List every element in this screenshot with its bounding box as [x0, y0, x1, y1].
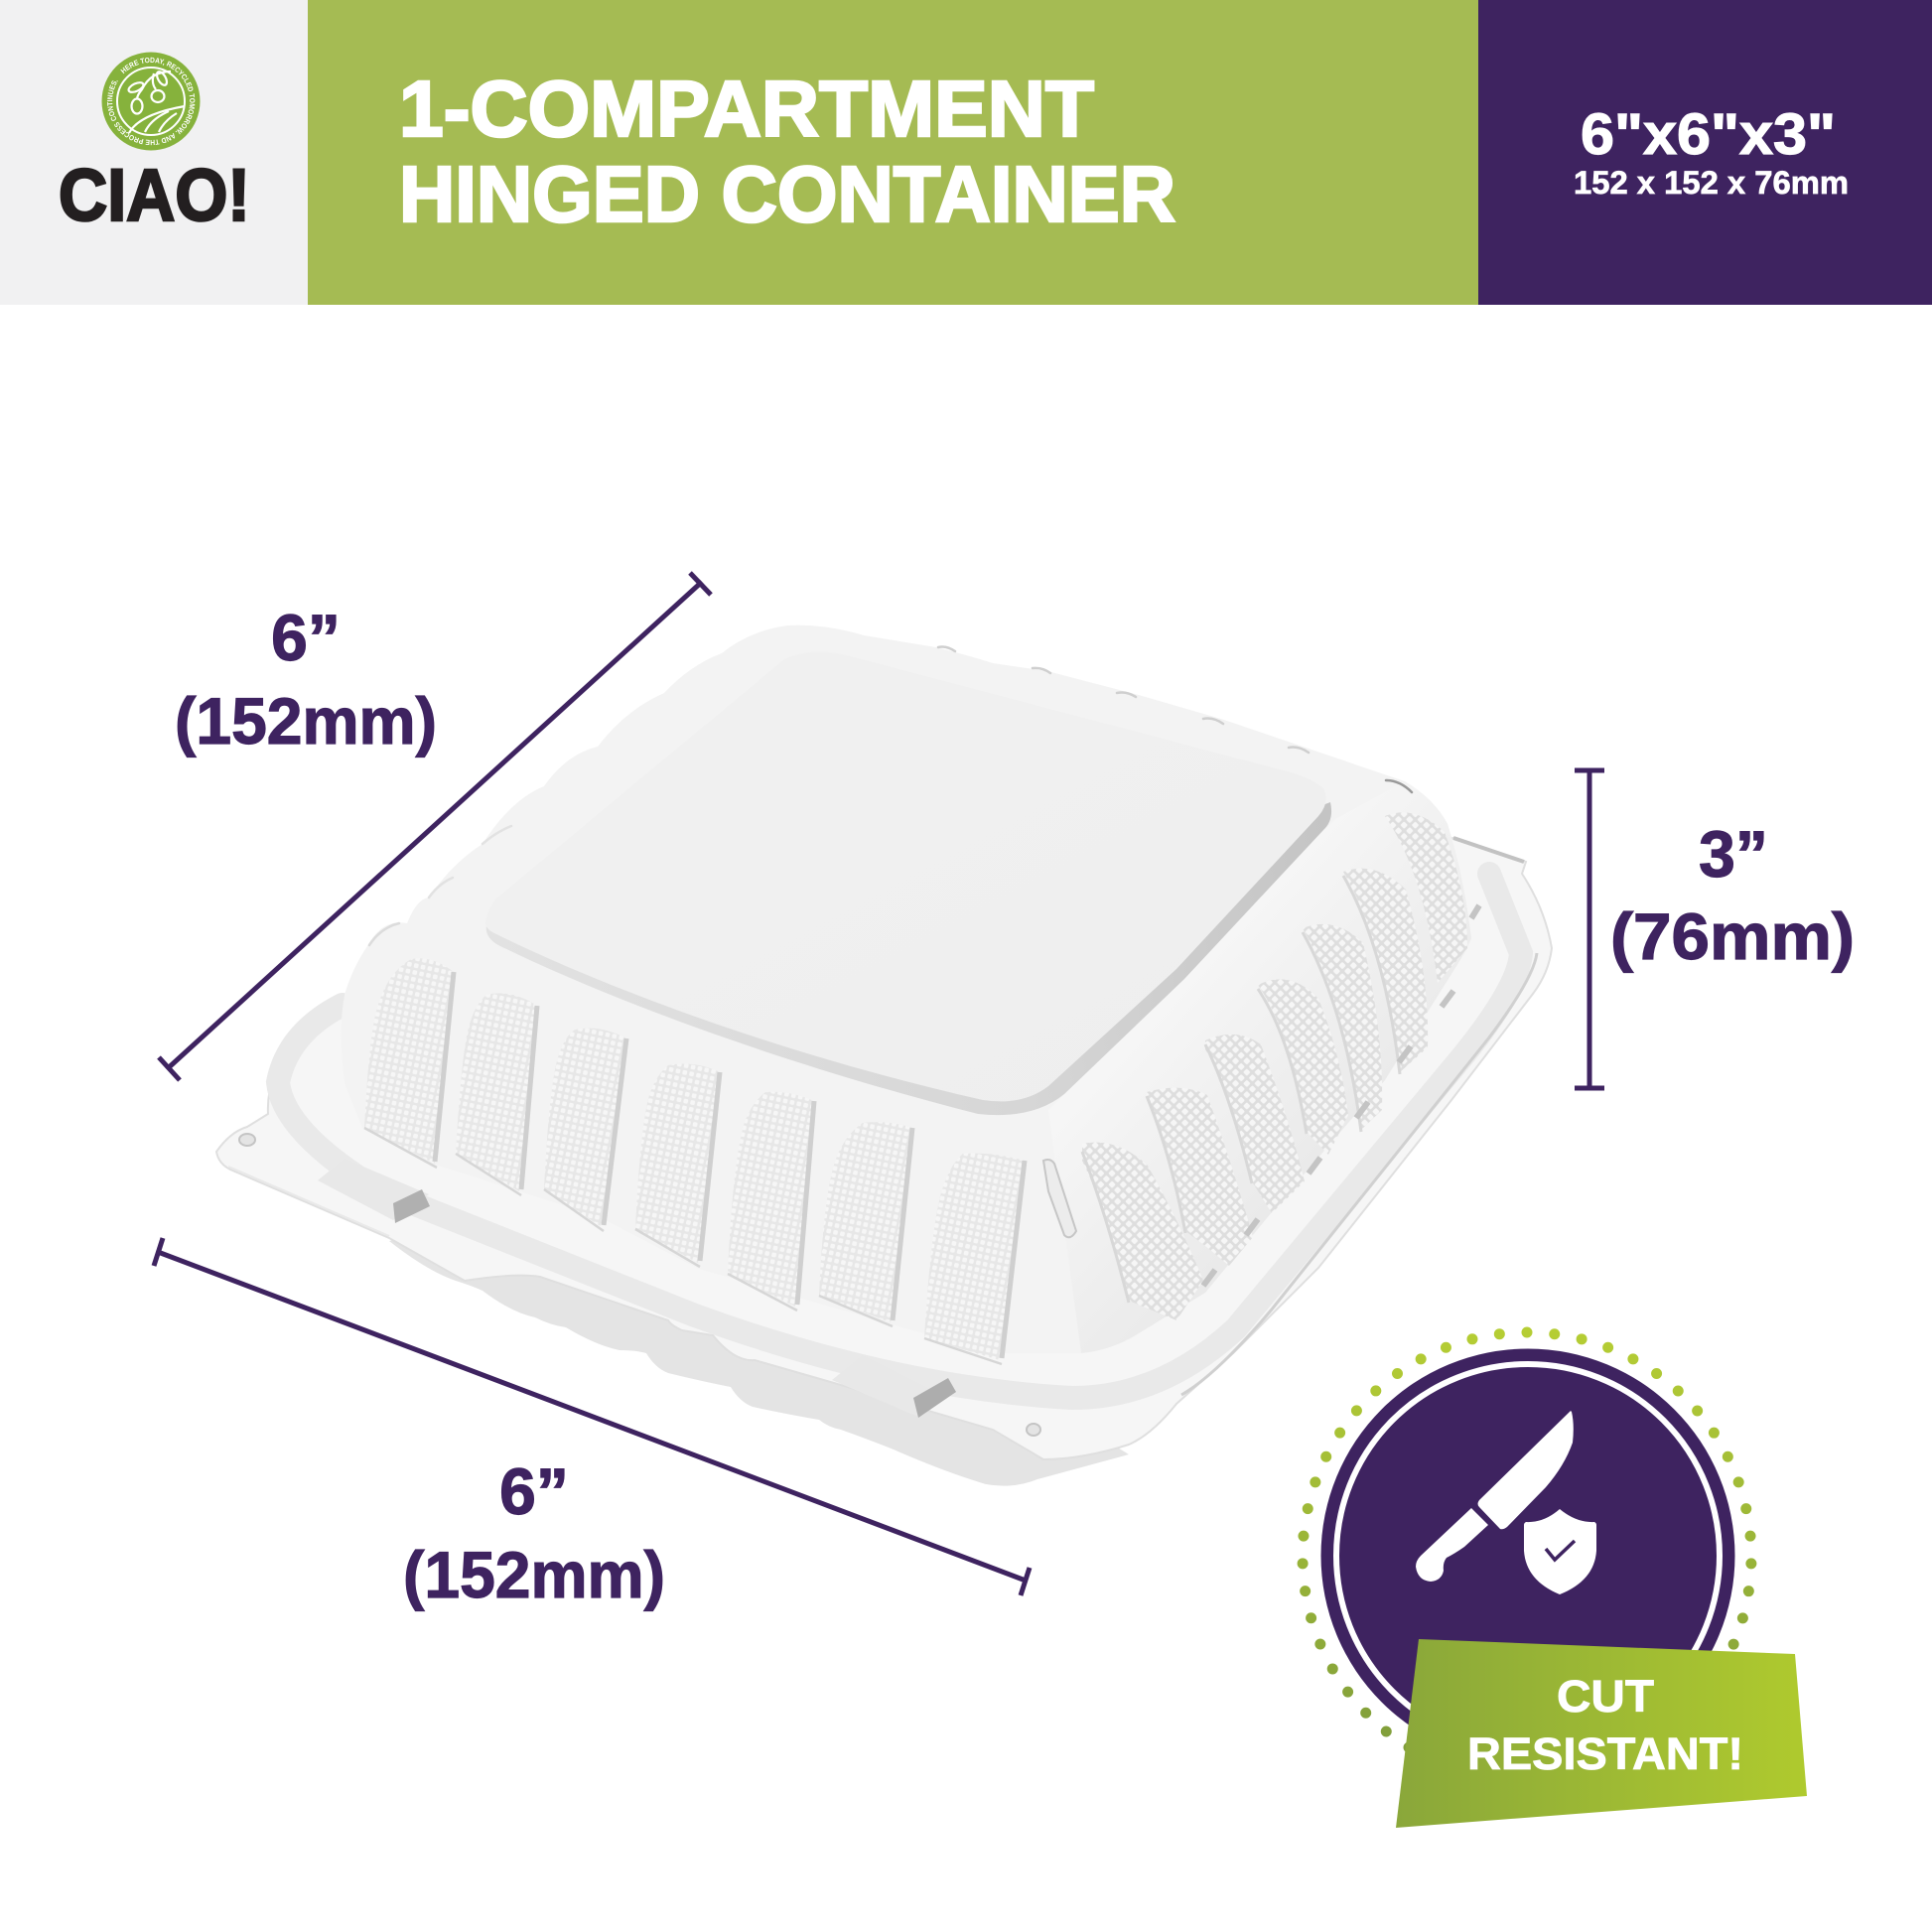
label: front width: 6” — [499, 1454, 569, 1528]
dimension line: back edge — [159, 573, 711, 1080]
lid scallop marks — [369, 647, 1412, 945]
rib zigzag shadows — [364, 1128, 1002, 1364]
label: back width: 6” — [271, 601, 341, 674]
logo panel — [0, 0, 308, 305]
banner text: RESISTANT! — [1467, 1728, 1743, 1779]
label: height: (76mm) — [1610, 899, 1855, 973]
title: HINGED CONTAINER — [399, 150, 1175, 238]
size panel — [1478, 0, 1932, 305]
front rib shadow lines — [435, 972, 1025, 1358]
front textured ribs — [364, 958, 1025, 1360]
channel notches — [1203, 905, 1479, 1286]
size text: 6"x6"x3" — [1581, 102, 1836, 167]
lid top plate edge — [486, 802, 1331, 1115]
label: back width — [175, 601, 437, 758]
container flange — [216, 838, 1552, 1459]
flange holes — [239, 1134, 1040, 1436]
size text: 152 x 152 x 76mm — [1574, 165, 1849, 201]
flange rim lines — [228, 838, 1537, 1398]
lid top plate — [485, 651, 1326, 1101]
left latch — [318, 1159, 430, 1223]
title panel — [308, 0, 1478, 305]
label: back width: (152mm) — [175, 684, 437, 758]
side rib shadow lines — [1082, 876, 1400, 1303]
logo wordmark: CIAO! — [59, 154, 250, 236]
dimension line: height — [1575, 770, 1604, 1088]
label: height — [1610, 817, 1855, 973]
header band — [0, 0, 1932, 305]
side textured ribs — [1082, 812, 1467, 1320]
title: 1-COMPARTMENT — [399, 65, 1094, 153]
dotted ring — [1303, 1332, 1751, 1781]
container base scallops — [389, 1211, 1129, 1486]
right latch — [832, 1355, 956, 1418]
product: white hinged container — [216, 625, 1552, 1486]
title — [399, 65, 1175, 238]
banner text: CUT — [1557, 1671, 1654, 1722]
label: height: 3” — [1699, 817, 1768, 891]
lid body — [342, 625, 1471, 1353]
green banner — [1396, 1639, 1807, 1828]
dimension line: front edge — [154, 1238, 1030, 1595]
icon: shield with check — [1524, 1509, 1596, 1594]
badge: cut resistant — [1303, 1332, 1807, 1828]
banner text — [1467, 1671, 1743, 1779]
label: front width — [403, 1454, 665, 1611]
purple disc — [1320, 1348, 1735, 1763]
label: front width: (152mm) — [403, 1538, 665, 1611]
size text — [1574, 102, 1849, 201]
icon: round olive logo: HERE TODAY, RECYCLED TOMORROW. AND THE PROCESS CONTINUES. — [107, 58, 195, 145]
vertical snap tab — [1043, 1160, 1076, 1237]
lid right wall — [1048, 781, 1471, 1353]
icon: knife — [1416, 1411, 1574, 1582]
